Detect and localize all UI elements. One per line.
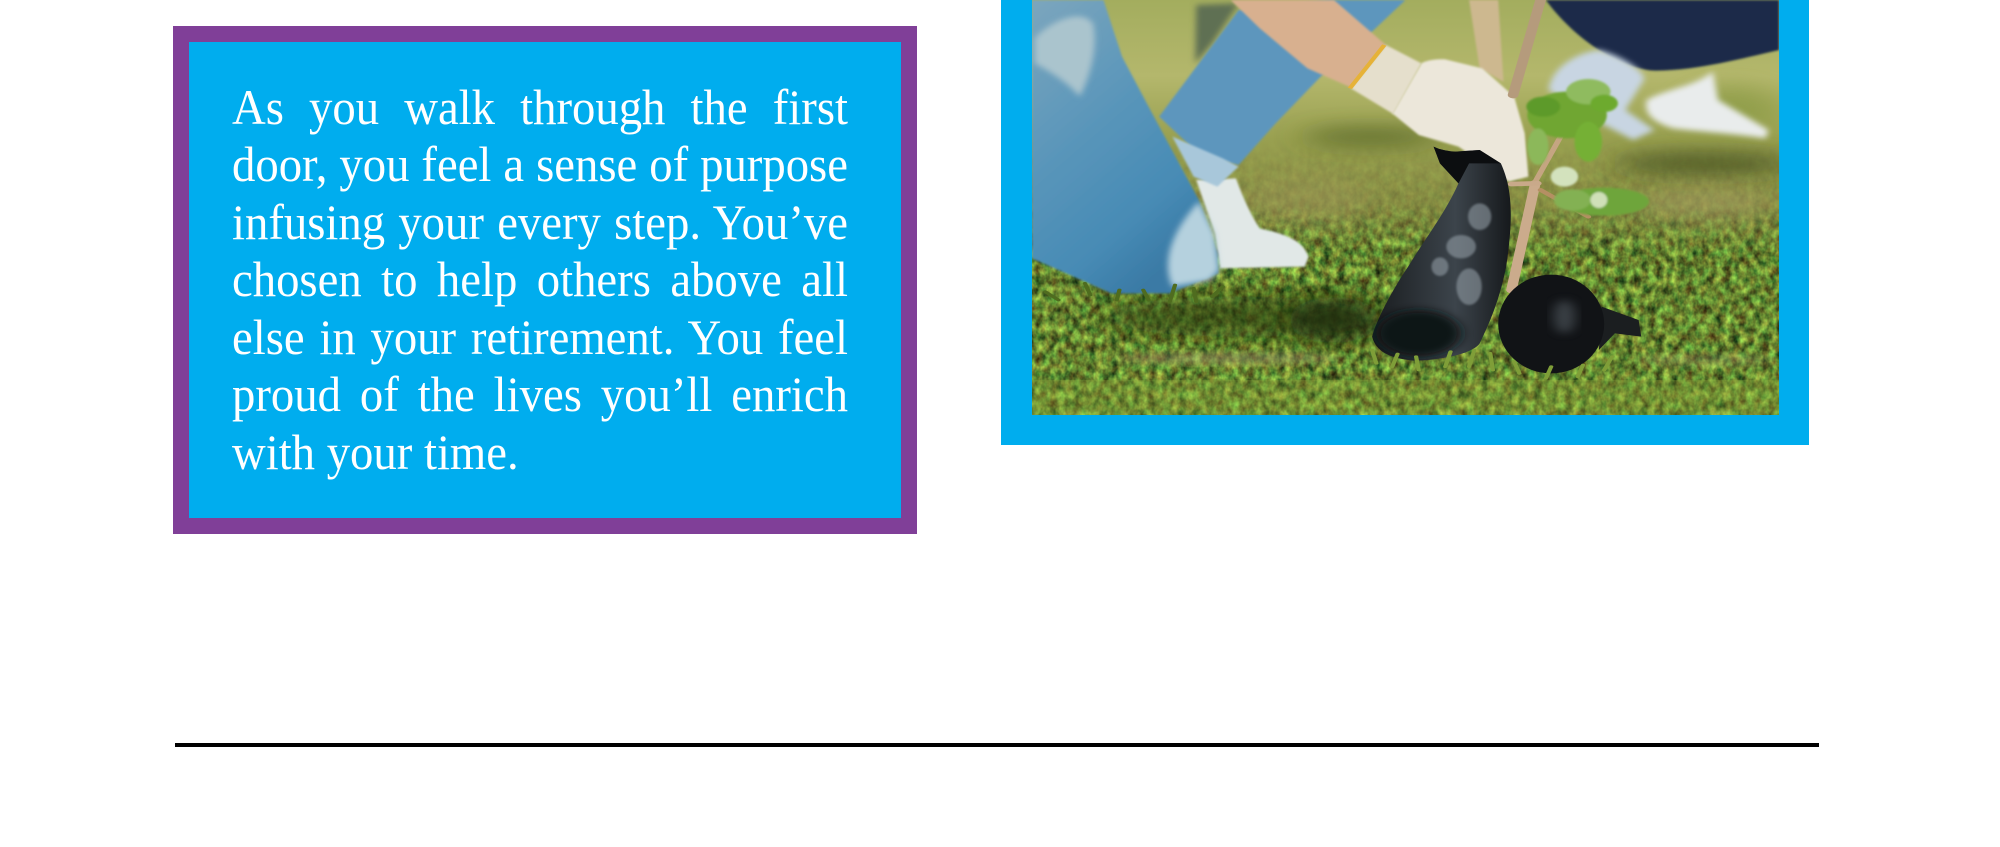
horizontal rule [175, 743, 1819, 747]
white sneaker [1196, 178, 1309, 268]
panel: blue photo frame [1001, 0, 1809, 445]
text block: first door description: As you walk through the first [232, 78, 848, 134]
text block: first door description: infusing your every step. You’ve [232, 194, 848, 250]
near knee: back leg jeans [1159, 0, 1406, 165]
knee highlight [1168, 202, 1219, 287]
jeans cuff [1172, 137, 1239, 187]
sapling stem [1511, 0, 1588, 290]
panel: purple-bordered blue callout box [173, 26, 917, 534]
photo illustration: volunteer planting a sapling [1032, 0, 1779, 415]
text block: first door description: else in your retirement. You feel [232, 308, 848, 364]
background post [1195, 3, 1239, 63]
text block: first door description: door, you feel a sense of purpose [232, 136, 848, 192]
black bag long [1372, 147, 1511, 361]
foreground grass tufts [1045, 283, 1612, 378]
text block: first door description: proud of the lives you’ll enrich [232, 366, 848, 422]
text block: first door description: with your time. [232, 424, 519, 480]
front thigh jeans [1032, 0, 1218, 293]
black bag round [1498, 275, 1641, 373]
text block: first door description [232, 78, 848, 480]
thigh highlight [1035, 16, 1095, 97]
text block: first door description: chosen to help others above all [232, 251, 848, 307]
grass ground [1032, 0, 1795, 415]
background stake [1469, 0, 1504, 82]
glove [1350, 45, 1528, 182]
second person: dark trousers and white shoes [1546, 0, 1779, 140]
sapling leaves [1526, 79, 1649, 216]
forearm [1231, 0, 1386, 87]
